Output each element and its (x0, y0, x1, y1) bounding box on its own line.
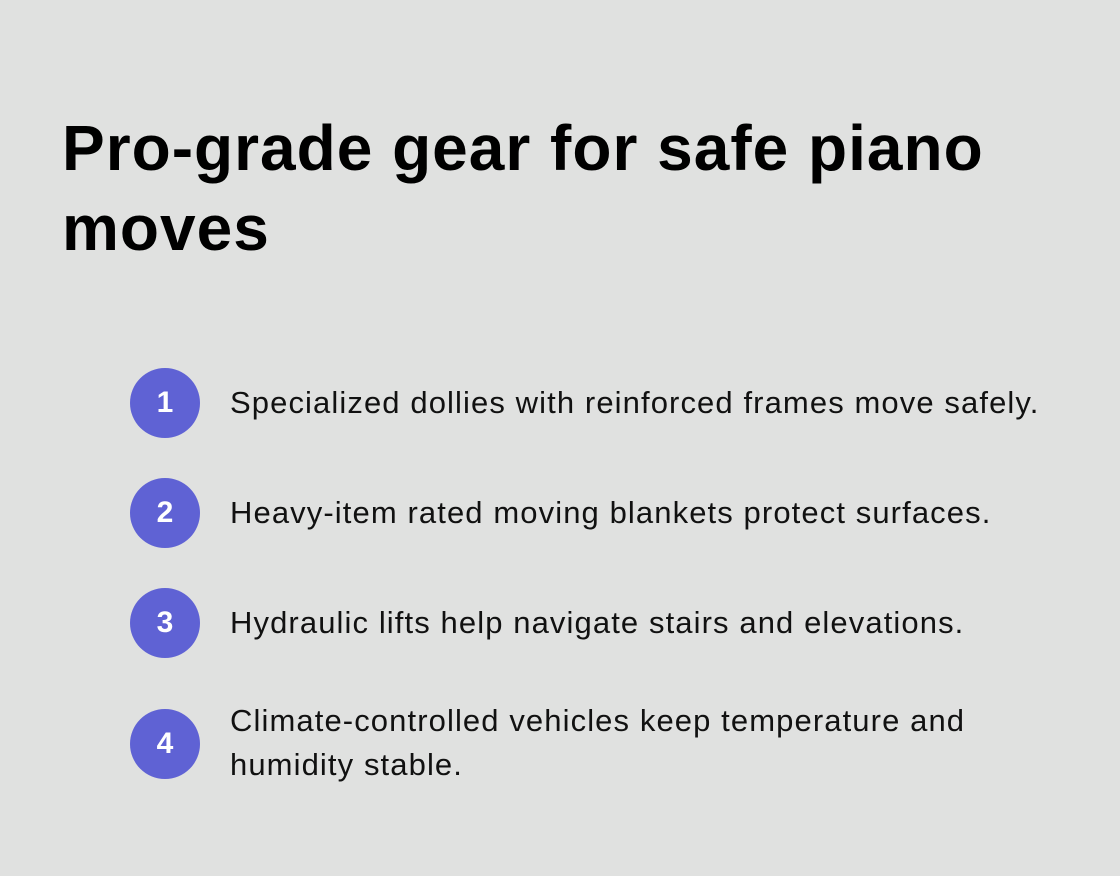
title: Pro-grade gear for safe piano (62, 112, 984, 184)
list item 1: Specialized dollies with reinforced frames move safely. (230, 385, 1039, 420)
number badge 1: 1 (157, 386, 173, 419)
list item 2 (130, 478, 991, 548)
number badge 3: 3 (157, 606, 173, 639)
list item 1 (130, 368, 1039, 438)
number badge 3 (130, 588, 200, 658)
title: moves (62, 192, 270, 264)
list item 2: Heavy-item rated moving blankets protect surfaces. (230, 495, 991, 530)
number badge 1 (130, 368, 200, 438)
list item 3 (130, 588, 964, 658)
number badge 4 (130, 709, 200, 779)
list item 4: humidity stable. (230, 747, 463, 782)
number badge 2 (130, 478, 200, 548)
number badge 4: 4 (157, 727, 173, 760)
list item 3: Hydraulic lifts help navigate stairs and elevations. (230, 605, 964, 640)
title (62, 112, 984, 264)
list item 4: Climate-controlled vehicles keep temperature and (230, 703, 965, 738)
list item 4 (130, 703, 965, 782)
number badge 2: 2 (157, 496, 173, 529)
